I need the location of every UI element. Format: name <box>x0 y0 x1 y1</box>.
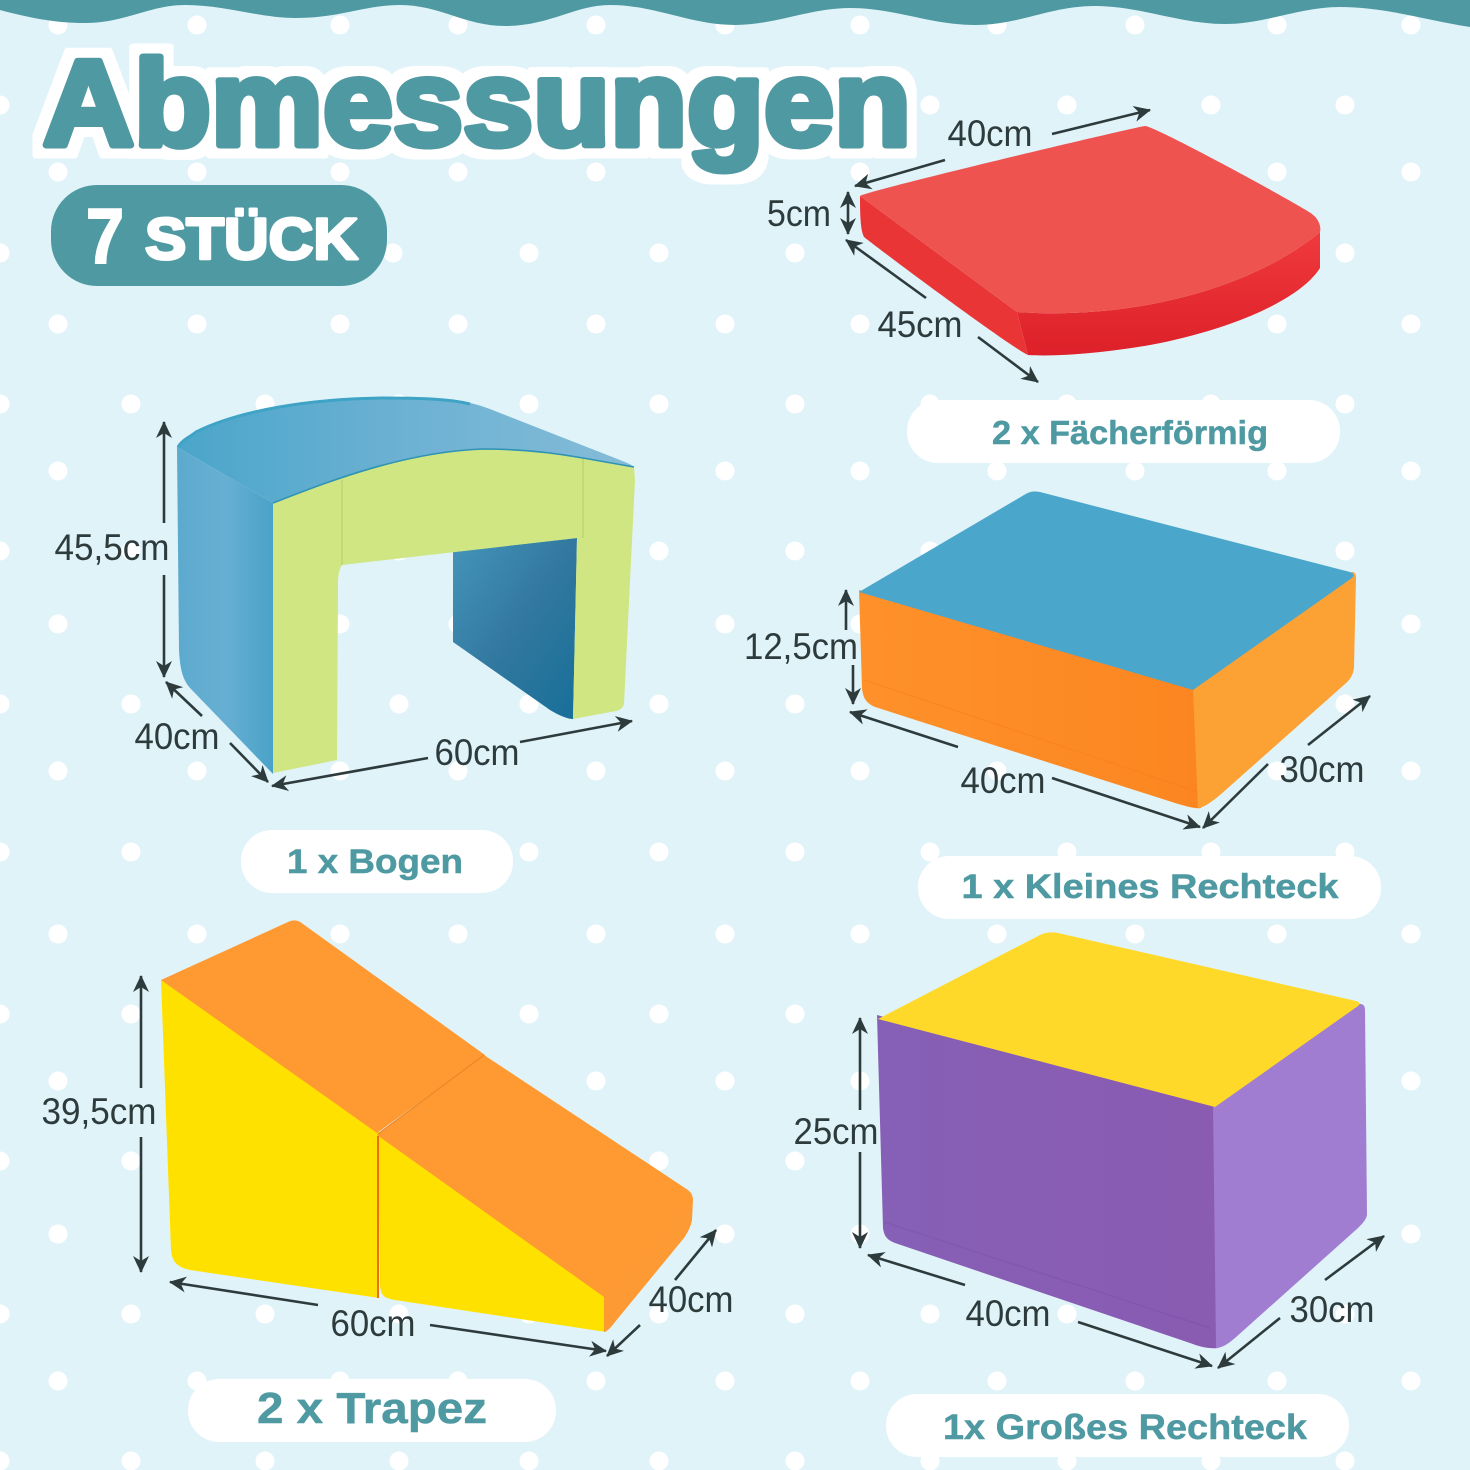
piece: arch <box>54 397 635 786</box>
dimension: trapezoid 40cm: 40cm <box>648 1279 734 1320</box>
dimension: trapezoid 39,5cm: 39,5cm <box>42 1091 156 1132</box>
piece: small rectangle <box>744 491 1370 828</box>
dimension: small rectangle 12,5cm <box>744 590 858 704</box>
dimension: large rectangle 25cm: 25cm <box>794 1111 878 1152</box>
dimension: arch 45,5cm: 45,5cm <box>54 527 170 568</box>
dimension: fan 40cm <box>855 110 1150 186</box>
label: Fächerförmig <box>907 400 1340 463</box>
title: Abmessungen <box>43 35 911 171</box>
dimension: trapezoid 60cm <box>170 1282 606 1351</box>
badge: 7 Stück: STÜCK <box>145 207 358 272</box>
label: Großes Rechteck <box>886 1394 1349 1457</box>
label: Kleines Rechteck <box>918 856 1381 919</box>
label: Großes Rechteck: 1x Großes Rechteck <box>943 1408 1308 1447</box>
dimension: small rectangle 40cm <box>850 712 1200 827</box>
piece: fan-shaped mat <box>767 110 1320 382</box>
dimension: fan 40cm: 40cm <box>948 113 1032 154</box>
dimension: large rectangle 40cm: 40cm <box>966 1293 1050 1334</box>
top wave banner <box>0 0 1470 27</box>
dimension: small rectangle 30cm <box>1203 696 1370 828</box>
label: Trapez: 2 x Trapez <box>257 1384 487 1433</box>
dimension: arch 40cm <box>134 682 268 782</box>
label: Fächerförmig: 2 x Fächerförmig <box>992 414 1268 451</box>
label: Bogen <box>241 830 513 893</box>
badge: 7 Stück <box>51 185 387 286</box>
dimension: small rectangle 12,5cm: 12,5cm <box>744 626 858 667</box>
dimension: fan 45cm <box>846 240 1038 382</box>
piece: large rectangle <box>794 932 1384 1368</box>
dimension: arch 40cm: 40cm <box>134 716 220 757</box>
label: Trapez <box>188 1379 556 1442</box>
dimension: small rectangle 30cm: 30cm <box>1280 749 1364 790</box>
badge: 7 Stück: 7 <box>86 192 124 280</box>
dimension: large rectangle 30cm <box>1218 1236 1384 1368</box>
dimension: trapezoid 40cm <box>607 1230 734 1356</box>
dimension: small rectangle 40cm: 40cm <box>960 760 1046 801</box>
dimension: trapezoid 60cm: 60cm <box>330 1303 416 1344</box>
dimension: arch 60cm <box>272 721 632 786</box>
dimension: large rectangle 40cm <box>868 1255 1212 1366</box>
label: Kleines Rechteck: 1 x Kleines Rechteck <box>962 868 1339 906</box>
dimension: fan 5cm: 5cm <box>767 193 831 234</box>
dimension: large rectangle 30cm: 30cm <box>1290 1289 1374 1330</box>
label: Bogen: 1 x Bogen <box>287 843 463 881</box>
piece: trapezoid pair <box>42 920 734 1356</box>
dimension: arch 60cm: 60cm <box>434 732 520 773</box>
dimension: fan 45cm: 45cm <box>878 304 962 345</box>
